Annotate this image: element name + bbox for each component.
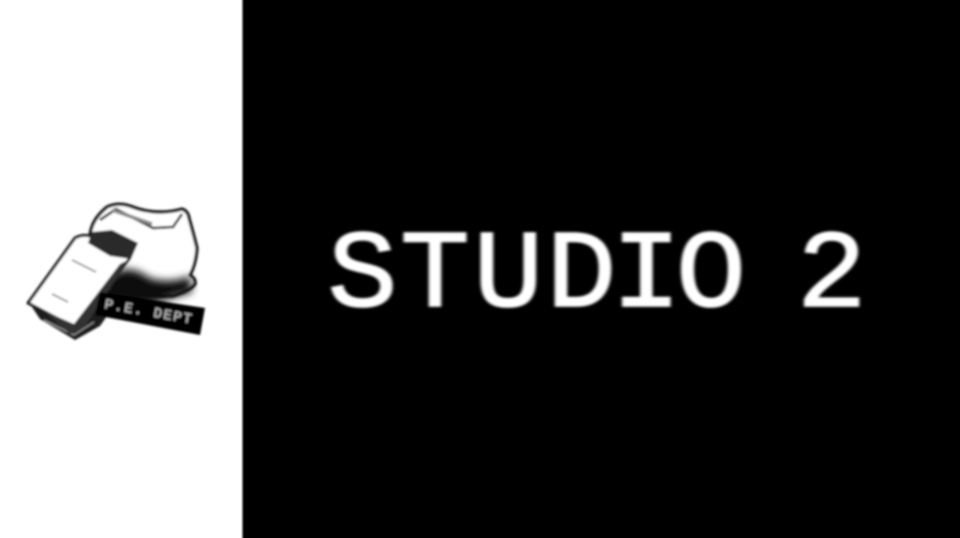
barrel lower shading <box>104 269 192 304</box>
icon: whistle with P.E. DEPT label <box>28 204 205 340</box>
title: STUDIO 2: STUDIO 2 <box>328 216 867 340</box>
mouthpiece faint details <box>52 260 96 302</box>
whistle barrel <box>90 204 197 296</box>
label: P.E. DEPT tag: P.E. DEPT <box>103 297 193 328</box>
mouthpiece <box>28 235 130 326</box>
barrel top band lines <box>100 209 182 228</box>
label: P.E. DEPT tag <box>95 292 205 335</box>
panel: black right area <box>244 0 960 538</box>
dark band <box>88 230 138 259</box>
whistle base ridges <box>30 300 118 340</box>
ridge highlights <box>44 320 94 335</box>
panel: white left column <box>0 0 241 538</box>
mouthpiece lower shadow <box>44 260 128 334</box>
